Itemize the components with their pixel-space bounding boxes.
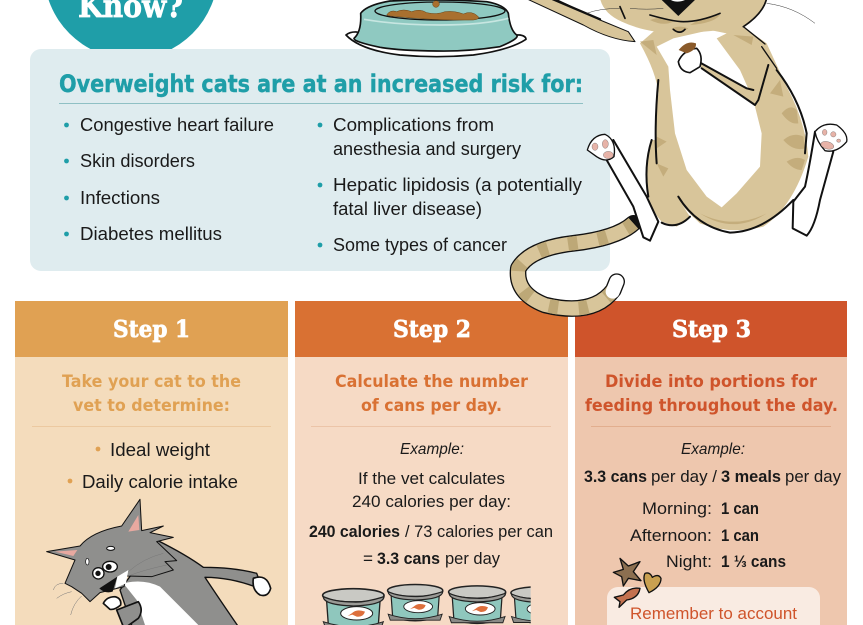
cat body: [640, 20, 808, 230]
text: portion example: 3.3 cans: [584, 467, 647, 486]
illustration: tan cat: [518, 0, 847, 309]
list: risks right column: anesthesia and surgery: [333, 139, 521, 159]
panel: step 2: [295, 0, 847, 625]
cat belly: [657, 30, 762, 207]
text: calculation example: per day: [445, 549, 500, 568]
right hind leg: [793, 132, 833, 236]
subheading: step 2: of cans per day.: [361, 396, 502, 416]
right hind paw: [815, 124, 847, 151]
subheading: step 3: [585, 372, 838, 416]
list: risks left column: Congestive heart failure: [80, 115, 274, 135]
text: calculation example: 240 calories per day:: [352, 492, 511, 511]
text: calculation example: Example:: [400, 441, 464, 458]
list: what to determine: [68, 440, 238, 492]
arm and paw: [678, 42, 768, 105]
panel: health risks: [30, 49, 610, 271]
list: what to determine: Daily calorie intake: [82, 472, 238, 492]
subheading: step 1: [62, 372, 241, 416]
text: calculation example: [309, 441, 553, 568]
text: portion example: 1 can: [721, 499, 759, 518]
text: portion example: per day: [785, 467, 841, 486]
icon: food bowl: [346, 0, 526, 57]
panel: step 1: [15, 301, 288, 625]
text: portion example: 3 meals: [721, 467, 781, 486]
subheading: step 2: Calculate the number: [335, 372, 529, 392]
subheading: step 3: feeding throughout the day.: [585, 396, 838, 416]
panel: step 3: [575, 301, 847, 625]
callout: remember to account: Remember to account: [630, 604, 797, 623]
list: risks left column: Infections: [80, 188, 160, 208]
callout: remember to account: [607, 587, 820, 625]
raised arm: [525, 0, 635, 42]
text: calculation example: / 73 calories per can: [405, 522, 553, 541]
text: portion example: 1 can: [721, 526, 759, 545]
list: risks right column: fatal liver disease): [333, 199, 482, 219]
subheading: step 1: vet to determine:: [73, 396, 230, 416]
text: portion example: per day /: [651, 467, 717, 486]
subheading: step 1: Take your cat to the: [62, 372, 241, 392]
text: portion example: 1 ⅓ cans: [721, 552, 786, 571]
text: portion example: Example:: [681, 441, 745, 458]
list: risks right column: Hepatic lipidosis (a potentially: [333, 175, 582, 195]
left thigh: [646, 140, 690, 227]
list: what to determine: Ideal weight: [110, 440, 210, 460]
subheading: step 2: [335, 372, 529, 416]
text: calculation example: 240 calories: [309, 522, 400, 541]
cat tail: [518, 223, 633, 309]
fur stripes: [640, 35, 805, 224]
text: calculation example: If the vet calculates: [358, 469, 505, 488]
text: portion example: Afternoon:: [630, 526, 712, 545]
list: risks right column: [318, 115, 582, 255]
text: portion example: Night:: [666, 552, 712, 571]
heading: step 2: Step 2: [393, 316, 471, 343]
left hind leg: [607, 140, 658, 241]
icon: grey cat: [47, 499, 271, 625]
heading: step 1: Step 1: [113, 316, 190, 343]
icon: cat food cans: [322, 584, 531, 625]
badge: Did you know: [44, 0, 218, 59]
list: risks left column: Diabetes mellitus: [80, 224, 222, 244]
text: calculation example: 3.3 cans: [377, 549, 440, 568]
list: risks left column: Skin disorders: [80, 151, 195, 171]
text: calculation example: =: [363, 549, 373, 568]
cat head: [587, 0, 815, 33]
list: risks left column: [64, 115, 274, 244]
text: portion example: [584, 441, 841, 571]
list: risks right column: Some types of cancer: [333, 235, 507, 255]
icon: cat treats: [613, 558, 661, 607]
text: portion example: Morning:: [642, 499, 712, 518]
heading: increased risk: Overweight cats are at an increased risk for:: [59, 70, 583, 98]
left hind paw: [587, 134, 614, 160]
list: risks right column: Complications from: [333, 115, 494, 135]
subheading: step 3: Divide into portions for: [605, 372, 818, 392]
heading: step 3: Step 3: [672, 316, 751, 343]
